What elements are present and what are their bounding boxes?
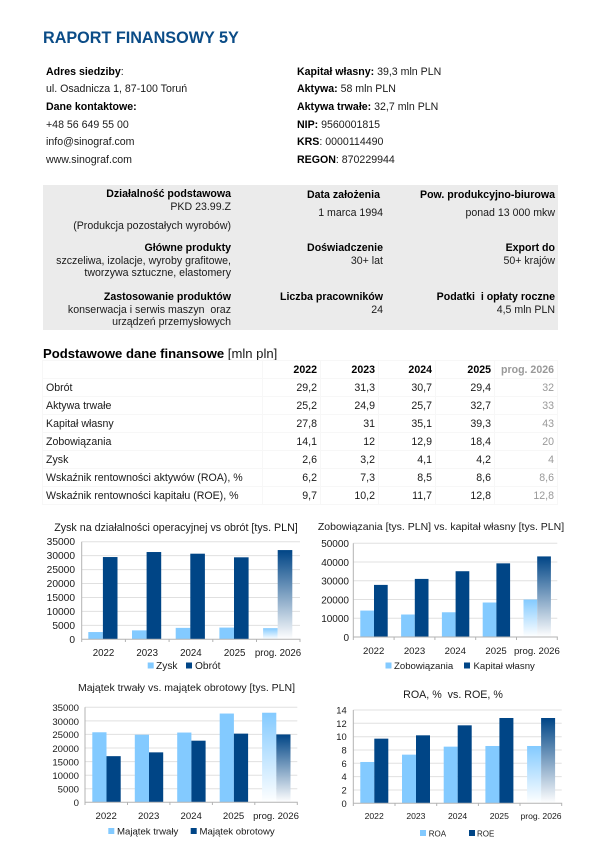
table: financial data: prog. 2026 xyxy=(501,364,554,376)
founding date heading: Data założenia xyxy=(307,189,380,201)
text block: address and contact: +48 56 649 55 00 xyxy=(46,119,129,131)
table: financial data: 24,9 xyxy=(354,400,375,412)
y axis labels: 35000 xyxy=(52,703,79,714)
table: financial data: 14,1 xyxy=(296,436,317,448)
y axis labels: 30000 xyxy=(321,576,349,588)
text block: company financial summary and registry numbers: Aktywa: 58 mln PLN xyxy=(297,83,396,95)
y axis labels: 4 xyxy=(341,771,347,782)
text block: company financial summary and registry numbers: NIP: 9560001815 xyxy=(297,119,380,131)
x axis labels: 2023 xyxy=(406,811,426,821)
table: financial data: 39,3 xyxy=(470,418,491,430)
table: financial data: Obrót xyxy=(46,382,72,394)
title: RAPORT FINANSOWY 5Y xyxy=(43,29,239,47)
y axis labels: 0 xyxy=(343,633,349,644)
x axis labels: 2022 xyxy=(96,811,117,822)
legend: Majątek obrotowy xyxy=(200,826,275,838)
x axis labels: 2023 xyxy=(138,811,159,822)
table: financial data: 4,1 xyxy=(417,454,432,466)
table: financial data: 11,7 xyxy=(412,490,432,502)
y axis labels: 2 xyxy=(341,784,347,796)
legend: ROE xyxy=(477,830,494,838)
table: financial data: 31,3 xyxy=(354,382,375,394)
chart: operating profit vs turnover xyxy=(47,522,301,672)
bars xyxy=(360,556,551,637)
y axis labels: 6 xyxy=(341,758,347,769)
table: financial data: 43 xyxy=(542,418,554,430)
table: financial data: 35,1 xyxy=(411,418,432,430)
x axis labels: 2024 xyxy=(445,646,467,657)
x axis labels: 2025 xyxy=(224,648,245,659)
legend: Majątek trwały xyxy=(117,826,179,838)
legend xyxy=(386,661,535,672)
table: financial data: Aktywa trwałe xyxy=(46,400,111,412)
x axis labels: 2025 xyxy=(485,646,507,657)
text block: address and contact xyxy=(46,66,187,166)
experience: Doświadczenie 30+ lat xyxy=(307,242,383,267)
y axis labels xyxy=(321,539,349,644)
core business: Działalność podstawowa PKD 23.99.Z xyxy=(106,188,231,213)
x axis labels: prog. 2026 xyxy=(255,648,301,659)
x axis labels: 2022 xyxy=(365,811,384,821)
table: financial data: 7,3 xyxy=(360,472,375,484)
table: financial data: 31 xyxy=(363,418,375,430)
x axis labels: prog. 2026 xyxy=(520,811,562,821)
y axis labels: 15000 xyxy=(47,593,75,604)
table: financial data: 3,2 xyxy=(360,454,375,466)
text block: address and contact: Dane kontaktowe: xyxy=(46,101,137,113)
x axis labels xyxy=(93,648,301,659)
y axis labels: 35000 xyxy=(47,537,75,548)
table: financial data: 12 xyxy=(363,436,375,448)
table: financial data: 4 xyxy=(548,454,554,466)
y axis labels: 25000 xyxy=(52,730,79,741)
x axis labels: 2023 xyxy=(404,646,425,657)
table: financial data: 32,7 xyxy=(470,400,491,412)
table: financial data: Zysk xyxy=(46,454,68,466)
x axis labels xyxy=(365,811,562,821)
table: financial data: 8,6 xyxy=(539,472,554,484)
x axis labels: 2025 xyxy=(490,811,509,821)
chart: ROA vs ROE xyxy=(336,689,562,838)
product applications: Zastosowanie produktów konserwacja i serwis maszyn oraz urządzeń przemysłowych xyxy=(68,291,231,328)
y axis labels: 10000 xyxy=(47,607,75,618)
x axis labels: 2025 xyxy=(223,811,244,822)
x axis labels: prog. 2026 xyxy=(253,811,299,822)
text block: address and contact: ul. Osadnicza 1, 87-100 Toruń xyxy=(46,83,187,95)
y axis labels: 10000 xyxy=(321,614,349,625)
table: financial data: 20 xyxy=(542,436,554,448)
table: financial data: 2022 xyxy=(293,364,317,376)
table: financial data: Wskaźnik rentowności aktywów (ROA), % xyxy=(46,472,243,484)
legend xyxy=(108,826,275,838)
table: financial data: 8,6 xyxy=(476,472,491,484)
taxes: Podatki i opłaty roczne 4,5 mln PLN xyxy=(437,291,555,316)
y axis labels: 20000 xyxy=(47,579,75,590)
chart title: Majątek trwały vs. majątek obrotowy [tys. PLN] xyxy=(78,682,295,694)
table: financial data: 12,8 xyxy=(533,490,554,502)
y axis labels: 0 xyxy=(341,798,347,809)
x axis labels: 2024 xyxy=(448,811,467,821)
y axis labels: 10 xyxy=(336,731,347,742)
table: financial data: 2024 xyxy=(408,364,432,376)
x axis labels: 2024 xyxy=(180,648,202,659)
legend xyxy=(420,830,494,838)
x axis labels: 2022 xyxy=(93,648,114,659)
y axis labels: 20000 xyxy=(52,744,79,755)
employees: Liczba pracowników 24 xyxy=(280,291,383,316)
y axis labels: 12 xyxy=(336,718,347,729)
table: financial data: 6,2 xyxy=(302,472,317,484)
legend: Zysk xyxy=(156,661,178,672)
table: financial data: 27,8 xyxy=(296,418,317,430)
main products: Główne produkty szczeliwa, izolacje, wyroby grafitowe, tworzywa sztuczne, elastomery xyxy=(56,242,231,279)
table: financial data: 29,2 xyxy=(296,382,317,394)
text block: company financial summary and registry numbers: Kapitał własny: 39,3 mln PLN xyxy=(297,66,441,78)
table: financial data: 2,6 xyxy=(302,454,317,466)
y axis labels: 0 xyxy=(69,635,75,646)
y axis labels: 14 xyxy=(336,704,347,716)
table: financial data: 4,2 xyxy=(476,454,491,466)
y axis labels: 0 xyxy=(74,798,79,809)
table: financial data: 29,4 xyxy=(470,382,491,394)
x axis labels: 2022 xyxy=(363,646,384,657)
x axis labels xyxy=(96,811,299,822)
bars xyxy=(360,718,555,803)
y axis labels xyxy=(52,703,79,809)
chart: fixed vs current assets xyxy=(52,682,299,838)
floor area: ponad 13 000 mkw xyxy=(465,207,555,219)
table: financial data: Kapitał własny xyxy=(46,418,114,430)
table: financial data: Wskaźnik rentowności kapitału (ROE), % xyxy=(46,490,239,502)
legend: Kapitał własny xyxy=(474,661,535,672)
y axis labels: 5000 xyxy=(58,784,79,796)
y axis labels: 40000 xyxy=(321,558,349,569)
x axis labels: prog. 2026 xyxy=(514,646,560,657)
y axis labels: 50000 xyxy=(321,539,349,550)
y axis labels: 8 xyxy=(341,744,347,756)
chart title: ROA, % vs. ROE, % xyxy=(403,689,503,701)
y axis labels: 15000 xyxy=(52,758,79,768)
y axis labels: 25000 xyxy=(47,565,75,576)
text block: company financial summary and registry numbers: Aktywa trwałe: 32,7 mln PLN xyxy=(297,101,438,113)
chart title: Zysk na działalności operacyjnej vs obrót [tys. PLN] xyxy=(54,522,298,534)
table: financial data: 18,4 xyxy=(470,436,491,448)
x axis labels: 2023 xyxy=(136,648,158,659)
table: financial data: 2025 xyxy=(467,364,491,376)
legend: Zobowiązania xyxy=(394,661,454,672)
export: Export do 50+ krajów xyxy=(503,242,555,267)
legend: Obrót xyxy=(195,661,221,672)
table: financial data: 10,2 xyxy=(354,490,375,502)
table: financial data: 9,7 xyxy=(302,490,317,502)
floor area heading: Pow. produkcyjno-biurowa xyxy=(420,189,555,201)
y axis labels xyxy=(336,704,347,809)
table: financial data: 32 xyxy=(542,382,554,394)
text block: company financial summary and registry numbers: REGON: 870229944 xyxy=(297,154,395,166)
table: financial data xyxy=(46,360,554,502)
table: financial data: Zobowiązania xyxy=(46,436,111,448)
text block: address and contact: www.sinograf.com xyxy=(46,154,132,166)
table: financial data: 8,5 xyxy=(417,472,432,484)
bars xyxy=(88,550,292,639)
x axis labels xyxy=(363,646,560,657)
core business description: (Produkcja pozostałych wyrobów) xyxy=(73,220,231,232)
x axis labels: 2024 xyxy=(181,811,203,822)
y axis labels: 5000 xyxy=(52,621,75,632)
chart title: Zobowiązania [tys. PLN] vs. kapitał własny [tys. PLN] xyxy=(318,521,564,533)
chart: liabilities vs equity xyxy=(318,521,564,672)
text block: company financial summary and registry numbers: KRS: 0000114490 xyxy=(297,136,383,148)
heading: basic financial data: Podstawowe dane finansowe [mln pln] xyxy=(43,346,277,361)
table: financial data: 12,9 xyxy=(411,436,432,448)
y axis labels: 20000 xyxy=(321,596,349,606)
text block: address and contact: info@sinograf.com xyxy=(46,136,134,148)
text block: address and contact: Adres siedziby: xyxy=(46,66,124,78)
founding date: 1 marca 1994 xyxy=(318,207,383,219)
legend xyxy=(148,661,221,672)
bars xyxy=(92,713,290,802)
y axis labels: 30000 xyxy=(47,551,75,562)
y axis labels: 30000 xyxy=(52,717,79,728)
table: financial data: 25,7 xyxy=(411,400,432,412)
table: financial data: 30,7 xyxy=(411,382,432,394)
legend: ROA xyxy=(429,830,447,838)
text block: company financial summary and registry numbers xyxy=(297,66,441,166)
y axis labels: 10000 xyxy=(52,771,79,782)
table: financial data: 12,8 xyxy=(470,490,491,502)
table: financial data: 2023 xyxy=(351,364,375,376)
table: financial data: 25,2 xyxy=(296,400,317,412)
y axis labels xyxy=(47,537,75,646)
table: financial data: 33 xyxy=(542,400,554,412)
panel: company profile xyxy=(43,185,558,330)
